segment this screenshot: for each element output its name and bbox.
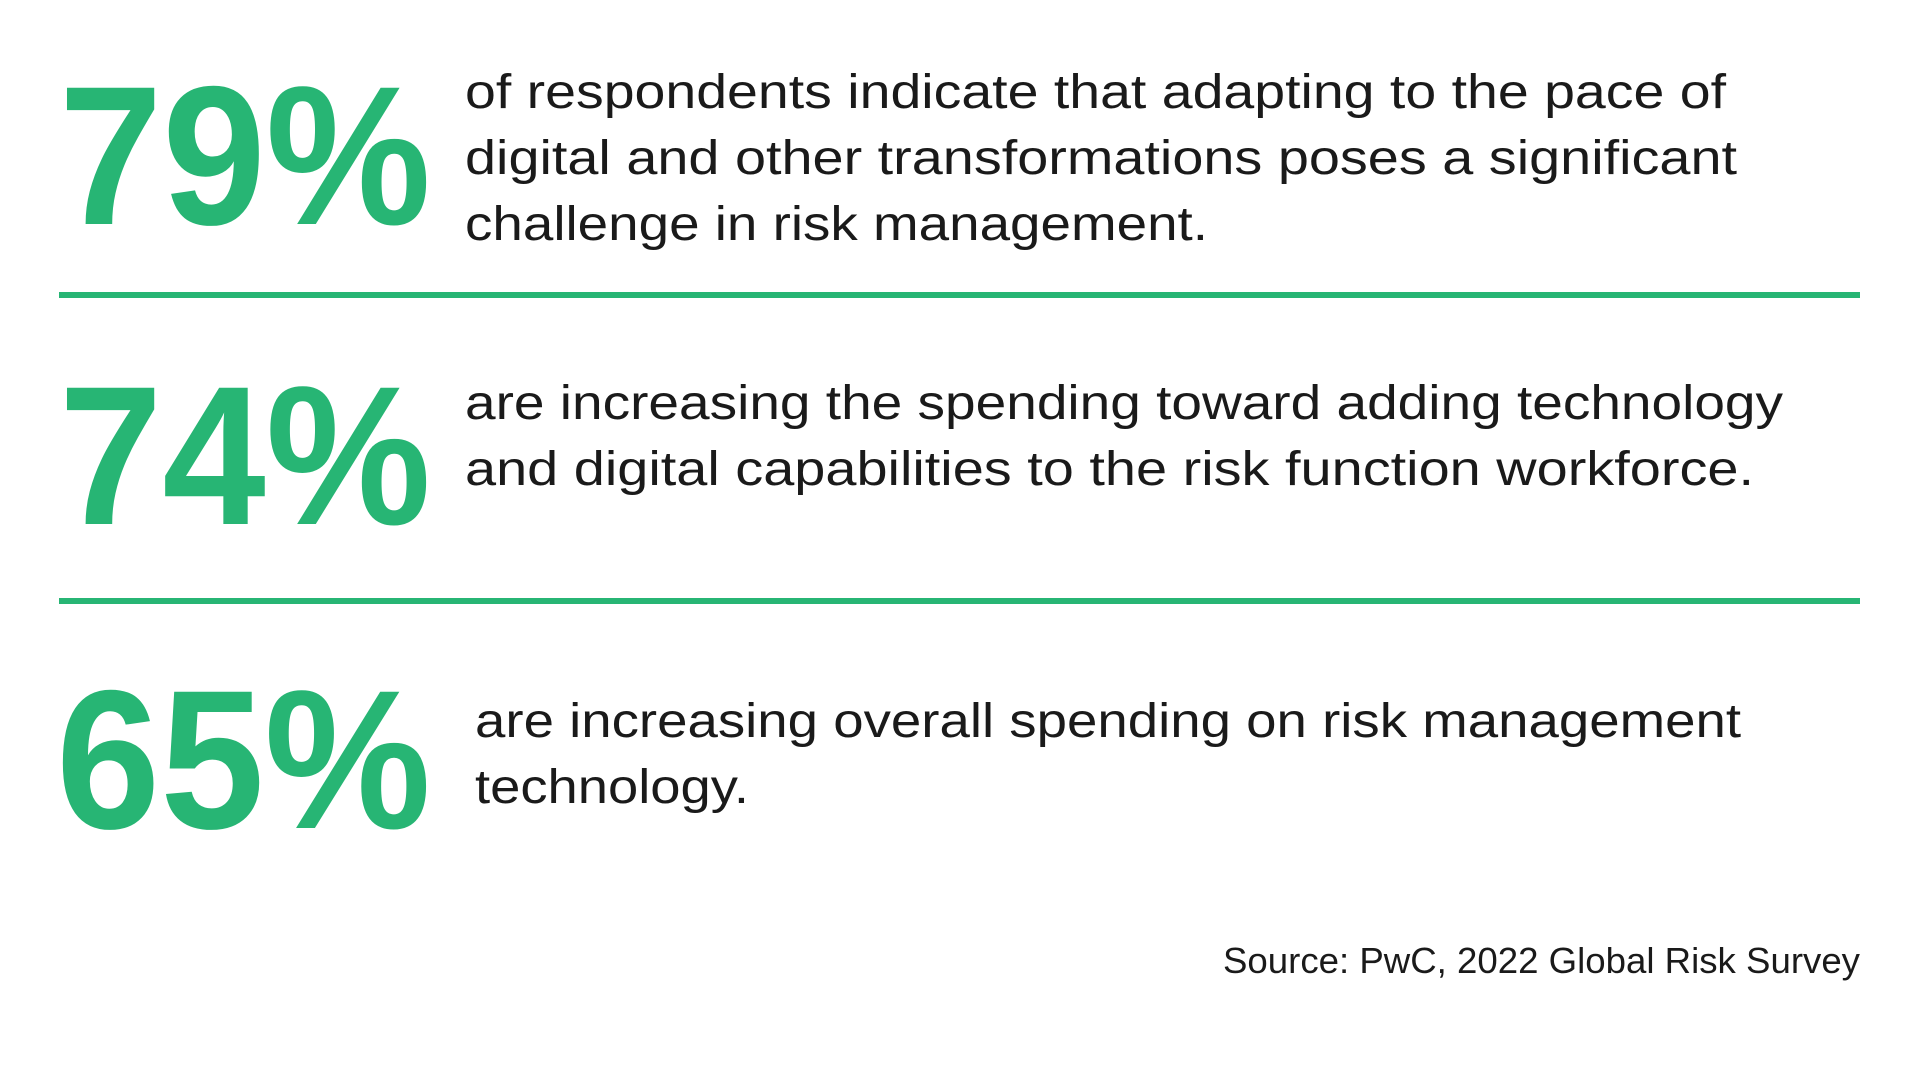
- text block 79%: challenge in risk management.: [465, 198, 1208, 251]
- text block 79%: of respondents indicate that adapting to the pace of: [465, 66, 1727, 119]
- text block 65%: [475, 695, 1741, 814]
- text block 74%: [465, 377, 1783, 496]
- text block 74%: are increasing the spending toward adding technology: [465, 377, 1783, 430]
- text block 74%: and digital capabilities to the risk function workforce.: [465, 443, 1754, 496]
- big number 79%: 79%: [59, 45, 431, 266]
- panel: stat 74%: [59, 345, 1783, 566]
- big number 65%: 65%: [56, 649, 431, 870]
- text block 79%: [465, 66, 1737, 251]
- text block 65%: are increasing overall spending on risk management: [475, 695, 1741, 748]
- panel: stat 65%: [56, 649, 1741, 870]
- text block 65%: technology.: [475, 761, 749, 814]
- text block 79%: digital and other transformations poses a significant: [465, 132, 1737, 185]
- panel: stat 79%: [59, 45, 1737, 266]
- source note: Source: PwC, 2022 Global Risk Survey: [1223, 940, 1860, 981]
- big number 74%: 74%: [59, 345, 431, 566]
